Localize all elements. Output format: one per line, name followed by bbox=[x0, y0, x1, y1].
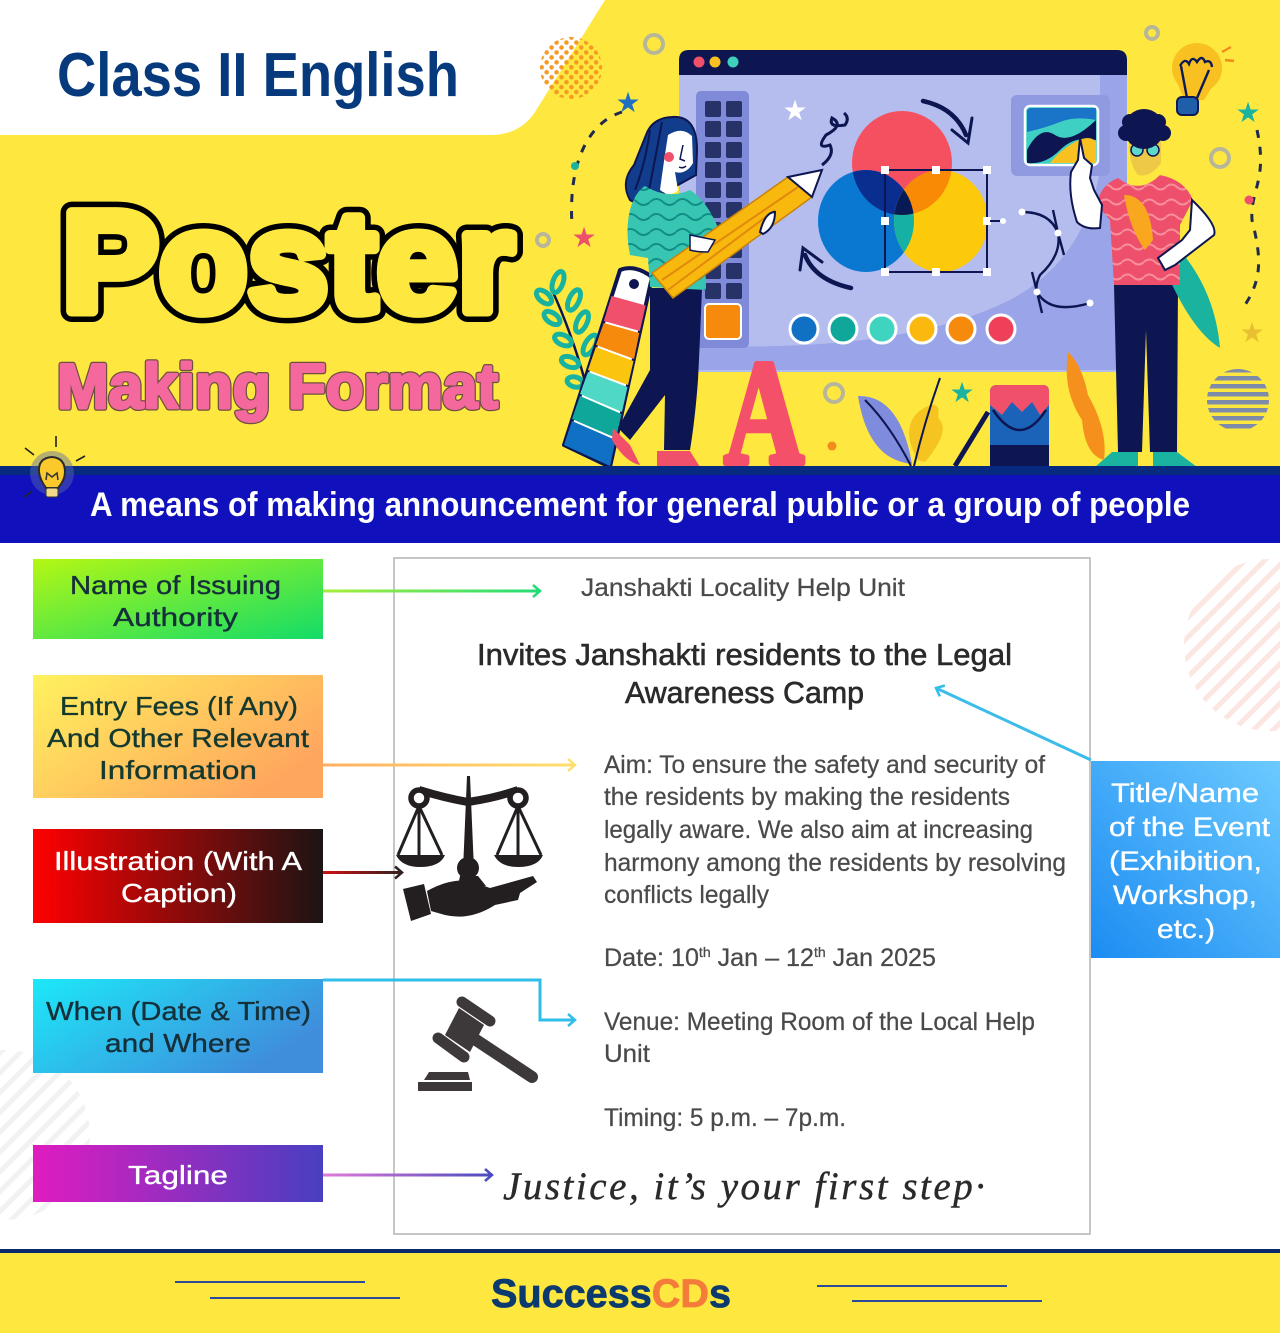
header background bbox=[0, 0, 1280, 480]
label: illustration: Caption) bbox=[121, 878, 237, 908]
event title: Invites Janshakti residents to the Legal bbox=[477, 637, 1012, 672]
stars: ★ bbox=[615, 87, 641, 118]
screen window bbox=[679, 50, 1127, 372]
picture panel bbox=[1011, 95, 1110, 176]
date: Jan – 12 bbox=[711, 944, 814, 972]
aim paragraph bbox=[604, 751, 1066, 909]
footer logo: SuccessCDs bbox=[491, 1272, 731, 1316]
label: title of the event bbox=[1091, 761, 1280, 958]
blue banner bbox=[0, 466, 1280, 543]
selection box bbox=[881, 166, 1006, 276]
stars: ★ bbox=[571, 222, 597, 253]
raised arm bbox=[1070, 138, 1102, 228]
label: entry fees: Entry Fees (If Any) bbox=[60, 691, 298, 721]
label: title of the event: of the Event bbox=[1109, 812, 1271, 842]
aim paragraph: conflicts legally bbox=[604, 881, 769, 909]
stars bbox=[571, 87, 1265, 408]
label: name of issuing authority: Authority bbox=[113, 602, 238, 632]
event title bbox=[477, 637, 1012, 710]
aim paragraph: Aim: To ensure the safety and security of bbox=[604, 751, 1045, 779]
feather bbox=[858, 396, 912, 466]
white title tab bbox=[0, 0, 605, 135]
label: tagline bbox=[33, 1145, 323, 1202]
label: when and where: When (Date & Time) bbox=[46, 996, 311, 1026]
icon: scales and hand bbox=[396, 776, 543, 921]
man figure bbox=[1070, 109, 1220, 467]
hand bbox=[690, 235, 715, 252]
title: Class II English: Class II English bbox=[57, 41, 459, 110]
label: name of issuing authority bbox=[33, 559, 323, 639]
brush blade bbox=[1162, 248, 1220, 348]
shoes bbox=[1095, 452, 1197, 467]
decoration: rings and dots bbox=[537, 27, 1261, 450]
illustration: designers at a screen bbox=[534, 27, 1269, 496]
plant left bbox=[534, 270, 600, 400]
label: title of the event: Workshop, bbox=[1113, 880, 1257, 910]
paint bucket bbox=[955, 385, 1049, 466]
decoration: halftone circle bbox=[540, 37, 602, 99]
face bbox=[1129, 140, 1161, 176]
label: entry fees: Information bbox=[99, 755, 257, 785]
curly hair bbox=[1118, 109, 1171, 149]
colour swatch fan bbox=[564, 268, 652, 467]
sweater bbox=[628, 186, 722, 290]
label: title of the event: Title/Name bbox=[1111, 778, 1259, 808]
tool palette bbox=[696, 91, 749, 348]
venue: Venue: Meeting Room of the Local Help bbox=[604, 1008, 1035, 1036]
label: entry fees bbox=[33, 675, 323, 798]
white star: ★ bbox=[782, 95, 808, 126]
label: title of the event: etc.) bbox=[1157, 914, 1215, 944]
banner text: A means of making announcement for general public or a group of people bbox=[90, 486, 1190, 524]
stars: ★ bbox=[949, 377, 975, 408]
decoration: striped circle bbox=[1207, 369, 1269, 431]
label: tagline: Tagline bbox=[128, 1160, 228, 1190]
heading: Making Format: Making Format bbox=[57, 352, 498, 422]
shoes bbox=[612, 428, 700, 467]
venue bbox=[604, 1008, 1035, 1068]
arrow: when and where bbox=[323, 980, 575, 1020]
rotation arrows bbox=[800, 101, 972, 288]
woman figure bbox=[612, 117, 822, 467]
date: th bbox=[814, 944, 826, 960]
orange leaf bbox=[1067, 352, 1105, 460]
decoration: left striped circle bbox=[0, 1050, 90, 1220]
footer bbox=[0, 1249, 1280, 1333]
arrow: illustration bbox=[323, 871, 402, 874]
label: title of the event: (Exhibition, bbox=[1109, 846, 1262, 876]
icon: gavel bbox=[418, 1002, 532, 1091]
label: when and where bbox=[33, 979, 323, 1073]
label: entry fees: And Other Relevant bbox=[47, 723, 310, 753]
timing: Timing: 5 p.m. – 7p.m. bbox=[604, 1104, 846, 1132]
tagline: Justice, it’s your first step· bbox=[503, 1165, 985, 1208]
colour swatches bbox=[790, 315, 1015, 343]
label: name of issuing authority: Name of Issuing bbox=[70, 570, 281, 600]
label: illustration: Illustration (With A bbox=[54, 846, 303, 876]
squiggle bbox=[821, 113, 847, 165]
arrow: authority bbox=[323, 590, 540, 592]
large pencil bbox=[652, 177, 812, 298]
letter A: A bbox=[724, 330, 804, 496]
date: Jan 2025 bbox=[826, 944, 936, 972]
arrow: tagline bbox=[323, 1174, 492, 1176]
navy trousers bbox=[618, 288, 702, 450]
cheek and features bbox=[664, 145, 686, 168]
issuing authority: Janshakti Locality Help Unit bbox=[581, 574, 905, 602]
date: Date: 10 bbox=[604, 944, 699, 972]
label: illustration bbox=[33, 829, 323, 923]
poster sample panel bbox=[394, 558, 1090, 1234]
icon: light bulb bbox=[1172, 43, 1234, 115]
yellow plant bbox=[909, 378, 943, 466]
face and neck bbox=[660, 131, 693, 194]
venue: Unit bbox=[604, 1040, 650, 1068]
icon: banner bulb bbox=[24, 436, 85, 497]
arrow: entry fees bbox=[323, 764, 575, 766]
label: when and where: and Where bbox=[105, 1028, 251, 1058]
heading: Poster: Poster bbox=[62, 183, 514, 342]
aim paragraph: the residents by making the residents bbox=[604, 783, 1010, 811]
heading: Making Format: Making Format bbox=[57, 352, 498, 422]
arrow: event title bbox=[936, 688, 1091, 760]
akimbo arm bbox=[1158, 200, 1215, 270]
event title: Awareness Camp bbox=[625, 675, 864, 710]
stars: ★ bbox=[1239, 317, 1265, 348]
hair bbox=[626, 117, 697, 203]
stars: ★ bbox=[1235, 97, 1261, 128]
decoration: right striped circle bbox=[1184, 559, 1280, 731]
shirt bbox=[1097, 175, 1193, 285]
aim paragraph: legally aware. We also aim at increasing bbox=[604, 816, 1033, 844]
venn circles bbox=[818, 111, 988, 272]
date: th bbox=[699, 944, 711, 960]
heading: Poster: Poster bbox=[62, 183, 514, 342]
trousers bbox=[1114, 285, 1178, 452]
aim paragraph: harmony among the residents by resolving bbox=[604, 849, 1066, 877]
bristles bbox=[1124, 195, 1153, 250]
bezier path tool bbox=[1018, 208, 1094, 313]
